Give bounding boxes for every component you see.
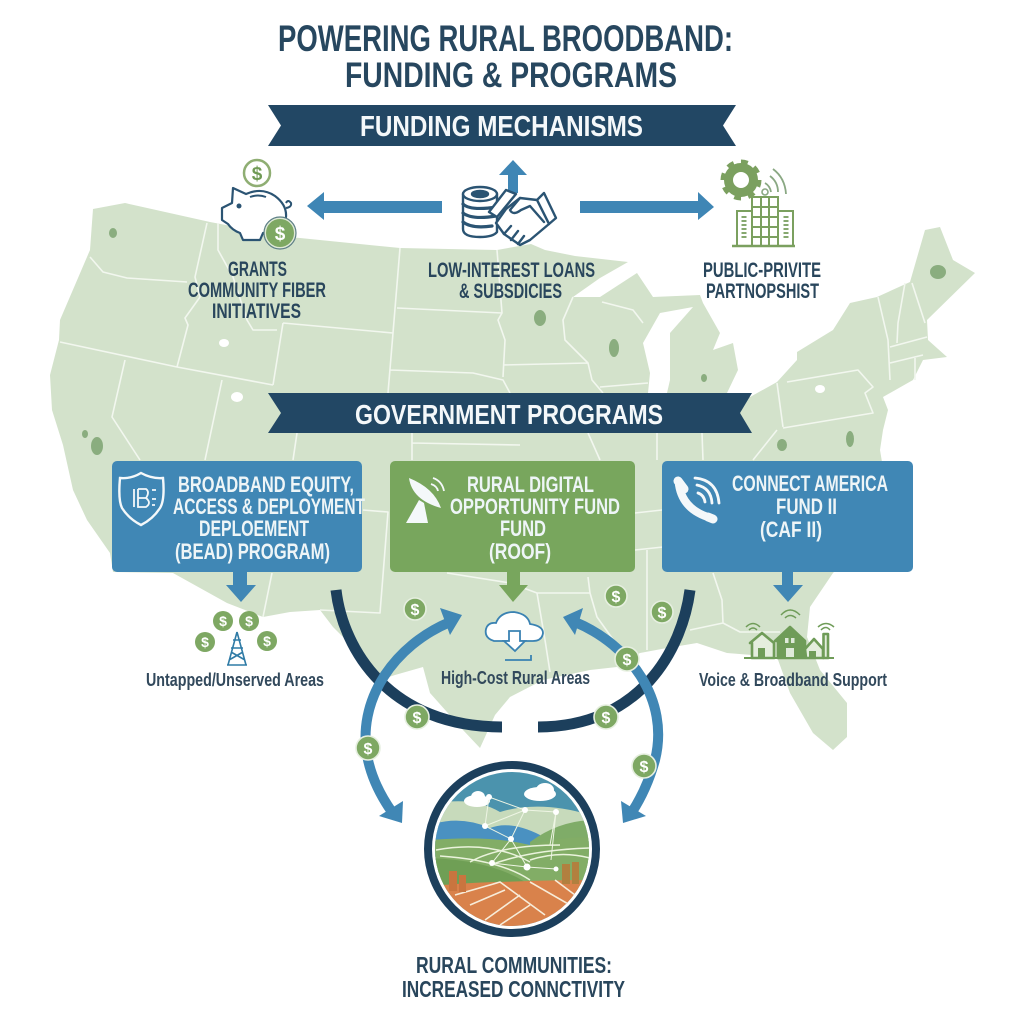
arrow: blue curve right [563,608,658,823]
text: high-cost areas: High-Cost Rural Areas [441,668,590,688]
panel: Connect America Fund II: CONNECT AMERICA [732,471,888,496]
icon: tower with coins: $ [263,633,271,649]
coins on flow: $ [612,589,621,606]
arrow: CAF down [773,572,803,602]
text: grants [188,258,326,323]
icon: shield [119,473,164,525]
panel: Connect America Fund II: FUND II [776,494,837,519]
text: grants: INITIATIVES [212,300,301,323]
map: United States background [50,203,975,750]
map trees [82,228,946,455]
icon: tower with coins [195,611,277,665]
text: grants: COMMUNITY FIBER [188,279,326,302]
coins on flow: $ [411,602,420,619]
icon: tower with coins: $ [219,613,227,629]
coins on flow: $ [640,759,649,776]
coins on flow: $ [364,741,373,758]
text: public-private partnerships [703,259,821,303]
text: rural communities: INCREASED CONNCTIVITY [402,976,625,1002]
title: POWERING RURAL BROODBAND: [278,18,733,59]
icon: piggy bank with coins [222,160,296,249]
panel: Rural Digital Opportunity Fund: FUND [500,516,546,541]
panel: Rural Digital Opportunity Fund [390,461,635,572]
icon: cloud download [486,612,543,660]
title [278,18,733,95]
text: low-interest loans: & SUBSDICIES [459,280,562,303]
panel: BEAD program: DEPLOEMENT [199,516,309,541]
arrow: BEAD down [226,572,256,602]
banner: government programs [268,393,752,433]
panel: Rural Digital Opportunity Fund: RURAL DIGITAL [467,472,594,497]
panel: BEAD program: (BEAD) PROGRAM) [175,539,330,564]
icon: coin stack and handshake [463,187,556,245]
text: public-private partnerships: PUBLIC-PRIVITE [703,259,821,282]
text: voice and broadband: Voice & Broadband Support [699,670,887,690]
coins on flow: $ [602,710,611,727]
office building [732,197,795,246]
panel: Rural Digital Opportunity Fund: (ROOF) [489,539,551,564]
panel: BEAD program [112,461,365,572]
arrow: up to banner [499,160,527,193]
text: low-interest loans: LOW-INTEREST LOANS [428,259,595,282]
gear [722,162,760,198]
icon: telephone with signal [678,478,719,519]
text: low-interest loans [428,259,595,303]
arrow: blue curve left [366,608,462,823]
coin: hollow: $ [252,164,263,185]
panel: Connect America Fund II [662,461,913,572]
coins on flow: $ [413,710,422,727]
icon: houses with signal [744,610,834,659]
arrow: right to partnerships [580,192,714,220]
banner: funding mechanisms: FUNDING MECHANISMS [360,111,643,143]
icon: tower with coins: $ [245,613,253,629]
illustration: rural community circle [428,765,596,933]
arrow: navy arc right [538,590,690,727]
arrow: left to grants [307,192,442,220]
text: grants: GRANTS [228,258,287,281]
text: public-private partnerships: PARTNOPSHIST [706,280,819,303]
arrow: RDOF down [499,572,528,602]
icon: tower with coins: $ [201,634,209,650]
text: rural communities [402,952,625,1002]
banner: funding mechanisms [268,105,736,146]
lakes [219,307,825,402]
panel: Rural Digital Opportunity Fund: OPPORTUNITY FUND [450,494,620,519]
banner: government programs: GOVERNMENT PROGRAMS [355,399,663,430]
state lines [60,223,927,672]
text: rural communities: RURAL COMMUNITIES: [416,952,612,978]
panel: BEAD program: ACCESS & DEPLOYMENT [173,494,365,519]
arrow: navy arc left [336,590,502,727]
coins on flow [356,585,673,778]
title: FUNDING & PROGRAMS [345,56,677,95]
coins on flow: $ [658,605,667,622]
coins on flow: $ [623,652,632,669]
icon: satellite dish [406,478,444,523]
panel: BEAD program: BROADBAND EQUITY, [178,472,354,497]
panel: Connect America Fund II: (CAF II) [760,517,822,542]
text: untapped areas: Untapped/Unserved Areas [146,670,324,690]
coin: filled: $ [275,224,286,245]
icon: gear, signal and office building [722,162,795,246]
